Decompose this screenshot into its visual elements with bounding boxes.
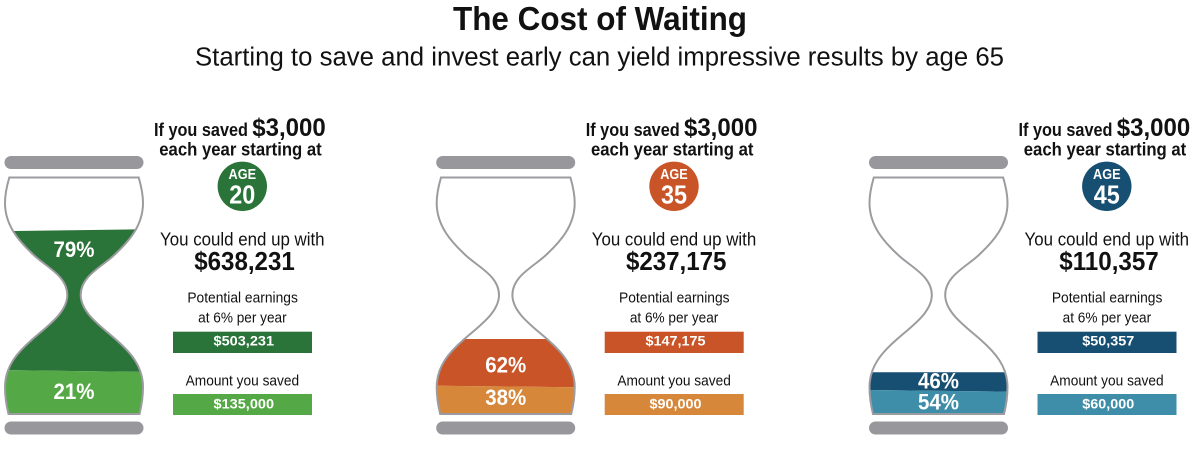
amount saved: [605, 373, 744, 415]
earnings: [1038, 291, 1176, 353]
title: The Cost of Waiting: [453, 0, 747, 37]
heading: if you saved: $3,000: [1117, 114, 1190, 142]
total amount: [592, 229, 756, 276]
total amount: You could end up with: [1025, 229, 1189, 250]
total amount: You could end up with: [592, 229, 756, 250]
age badge: AGE: [229, 166, 256, 183]
amount saved: $90,000: [650, 395, 702, 411]
earnings: Potential earnings: [1052, 291, 1162, 307]
age badge: 45: [1094, 179, 1120, 209]
heading: if you saved: each year starting at: [159, 140, 322, 160]
heading: if you saved: $3,000: [252, 114, 326, 142]
total amount: [160, 229, 325, 276]
earnings: at 6% per year: [198, 311, 287, 327]
hourglass: age 20: 79%: [54, 237, 94, 262]
hourglass: age 20: [0, 156, 148, 434]
total amount: $638,231: [194, 246, 295, 276]
hourglass: age 20: 21%: [54, 379, 94, 404]
amount saved: $135,000: [214, 395, 274, 411]
hourglass: age 35: [432, 156, 580, 434]
amount saved: Amount you saved: [1050, 373, 1164, 389]
age badge: [1082, 162, 1132, 211]
total amount: $110,357: [1059, 246, 1159, 276]
age badge: AGE: [660, 166, 688, 183]
panel: age 45: [864, 114, 1190, 434]
earnings: [605, 291, 744, 353]
earnings: at 6% per year: [1063, 311, 1151, 327]
hourglass: age 45: 46%: [918, 368, 959, 393]
age badge: 35: [661, 179, 687, 209]
hourglass: age 35: 62%: [485, 353, 526, 378]
hourglass: age 45: [864, 156, 1012, 434]
total amount: [1025, 229, 1189, 276]
age badge: [218, 162, 267, 211]
amount saved: [173, 373, 312, 415]
earnings: at 6% per year: [630, 311, 718, 327]
heading: if you saved: If you saved: [586, 120, 680, 140]
total amount: $237,175: [626, 246, 726, 276]
total amount: You could end up with: [160, 229, 325, 250]
subtitle: Starting to save and invest early can yield impressive results by age 65: [195, 44, 1004, 72]
hourglass: age 45: 54%: [918, 390, 959, 415]
panel: age 35: [432, 114, 757, 434]
heading: if you saved: each year starting at: [1024, 140, 1186, 160]
heading: if you saved: [154, 114, 326, 160]
earnings: $50,357: [1082, 333, 1135, 349]
panel: age 20: [0, 114, 326, 434]
heading: if you saved: [1018, 114, 1190, 160]
earnings: $503,231: [214, 333, 274, 349]
hourglass: age 35: 38%: [485, 385, 526, 410]
amount saved: [1038, 373, 1176, 415]
age badge: AGE: [1093, 166, 1121, 183]
heading: if you saved: If you saved: [1018, 120, 1112, 140]
amount saved: Amount you saved: [186, 373, 299, 389]
heading: if you saved: each year starting at: [591, 140, 753, 160]
earnings: Potential earnings: [619, 291, 730, 307]
heading: if you saved: [586, 114, 757, 160]
earnings: Potential earnings: [187, 291, 298, 307]
age badge: [649, 162, 699, 211]
earnings: [173, 291, 312, 353]
amount saved: $60,000: [1082, 395, 1135, 411]
earnings: $147,175: [646, 333, 706, 349]
heading: if you saved: If you saved: [154, 120, 248, 140]
heading: if you saved: $3,000: [684, 114, 757, 142]
amount saved: Amount you saved: [617, 373, 731, 389]
age badge: 20: [229, 179, 255, 209]
